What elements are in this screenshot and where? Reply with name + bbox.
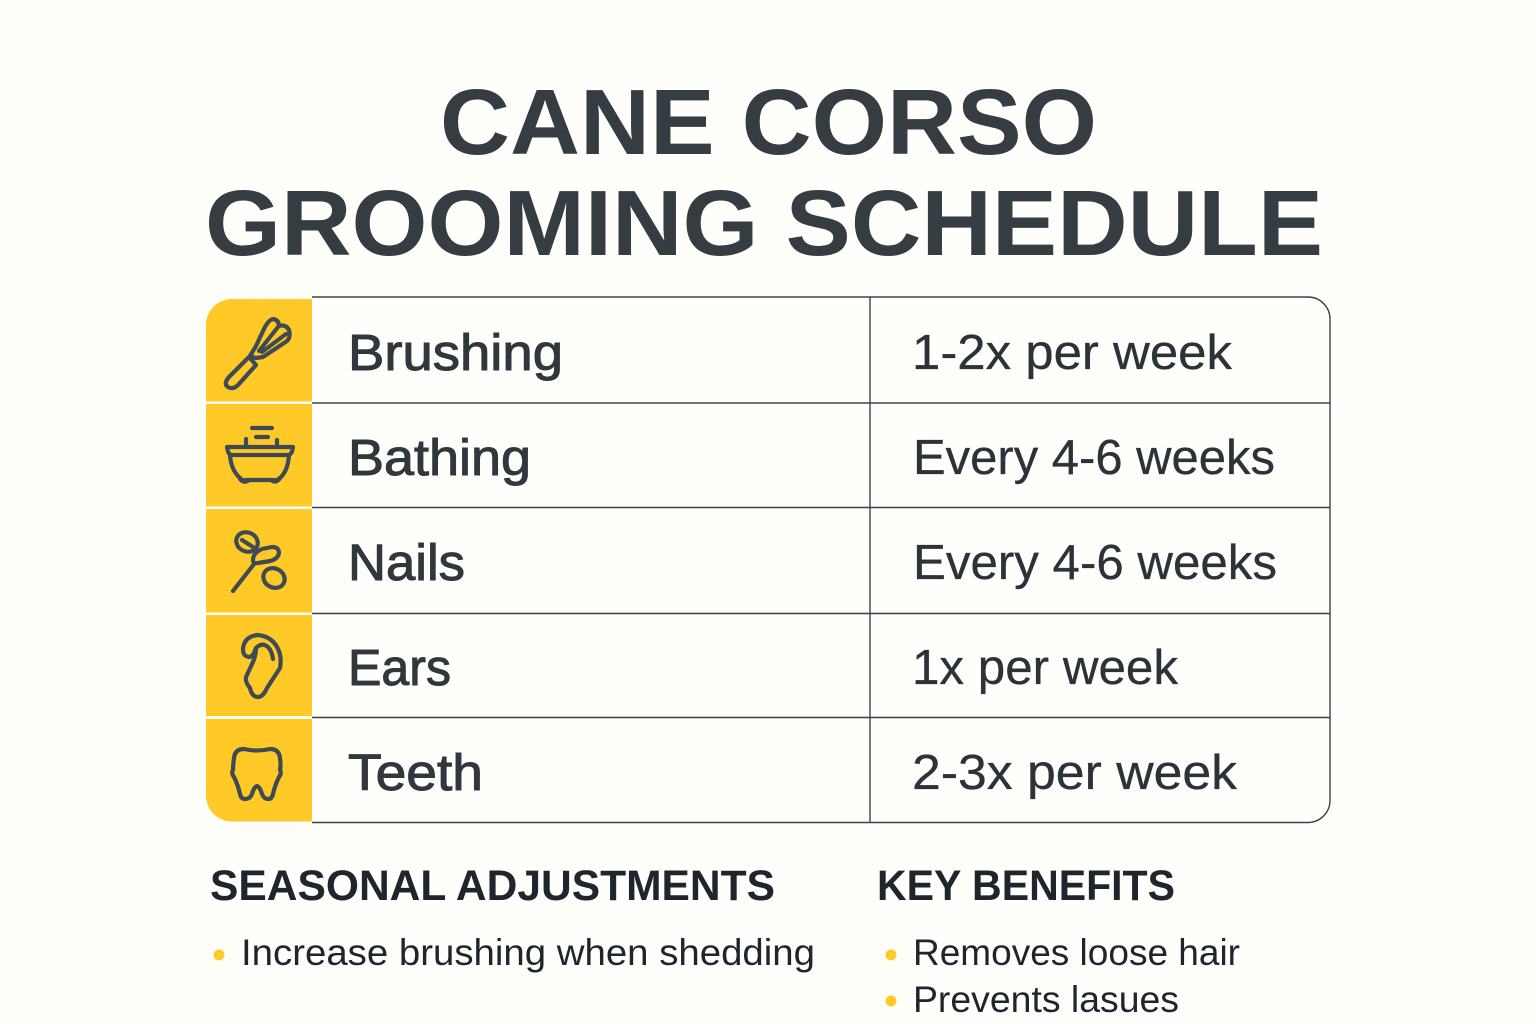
heading: key benefits: KEY BENEFITS [877, 862, 1175, 910]
icon: nail tools [233, 529, 288, 592]
bullet list: Removes loose hair [913, 931, 1240, 973]
icon: bath tub [227, 428, 293, 482]
row values: frequency: 1-2x per week [912, 326, 1233, 380]
row values: frequency [912, 326, 1277, 800]
icon: tooth [232, 749, 281, 799]
row values: frequency: Every 4-6 weeks [913, 431, 1275, 485]
row values: frequency: 2-3x per week [912, 746, 1238, 800]
table grid [312, 297, 1330, 822]
row values: frequency: Every 4-6 weeks [913, 536, 1277, 590]
heading: seasonal adjustments: SEASONAL ADJUSTMENTS [210, 862, 775, 910]
row values: frequency: 1x per week [912, 641, 1178, 695]
row labels: tasks [348, 324, 563, 801]
icon: ear [243, 635, 281, 697]
schedule table [206, 297, 1330, 822]
title [205, 70, 1323, 275]
title: GROOMING SCHEDULE [205, 171, 1323, 275]
row labels: tasks: Teeth [348, 744, 483, 801]
icon cell: teeth [206, 719, 312, 822]
row labels: tasks: Nails [348, 534, 465, 591]
row labels: tasks: Bathing [348, 429, 531, 486]
panel: seasonal adjustments [210, 862, 815, 973]
panel: key benefits [877, 862, 1240, 1020]
icon cell: nails [206, 509, 312, 612]
row labels: tasks: Brushing [348, 324, 563, 381]
icon cell: brushing [206, 299, 312, 402]
bullet item: Increase brushing when shedding [241, 931, 815, 973]
icon cell: bathing [206, 404, 312, 506]
title: CANE CORSO [440, 70, 1097, 174]
icon: brush [226, 319, 290, 388]
icon cell: ears [206, 615, 312, 716]
bullet list [886, 931, 1240, 1020]
row labels: tasks: Ears [348, 639, 451, 696]
bullet list: Prevents lasues [913, 978, 1179, 1020]
